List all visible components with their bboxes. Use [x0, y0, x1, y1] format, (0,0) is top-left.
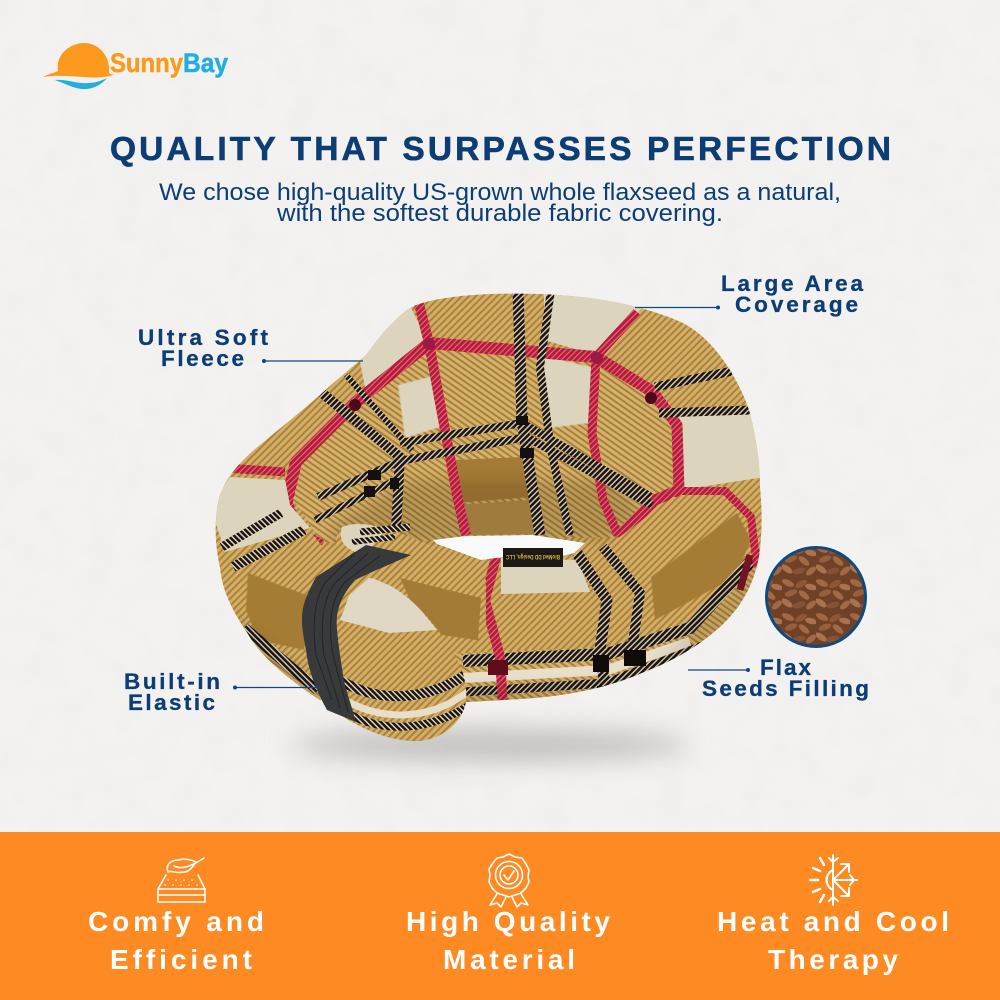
subtitle: [159, 179, 841, 227]
front black crossings: [488, 650, 646, 688]
callout: ultra soft fleece: [138, 325, 363, 371]
callout: large area coverage: Large Area: [721, 271, 863, 296]
back plaid red lines: [287, 300, 679, 545]
callout: built-in elastic: Elastic: [128, 690, 215, 715]
logo: SunnyBay: [43, 43, 183, 89]
end roll pillow: [340, 578, 466, 742]
icon: mattress with feather: [158, 858, 205, 902]
bottom band: [244, 558, 758, 702]
callout: built-in elastic: Built-in: [124, 669, 220, 694]
logo wordmark: Sunny: [110, 48, 183, 78]
well cream patches: [398, 355, 594, 438]
text: comfy and efficient: [88, 906, 264, 975]
subtitle: We chose high-quality US-grown whole flaxseed as a natural,: [159, 179, 841, 206]
built-in elastic band: [302, 545, 411, 722]
icon: sun over waves: [43, 43, 118, 89]
inner well: [287, 343, 679, 543]
icon: heat and cool: [810, 855, 857, 905]
callout: flax seeds filling: [688, 655, 869, 701]
left ring red band: [226, 468, 285, 472]
front cream patches: [210, 477, 590, 594]
text: comfy and efficient: Comfy and: [88, 906, 264, 937]
fabric tag: [503, 548, 563, 567]
callout: flax seeds filling: Flax: [760, 655, 811, 680]
footer band: [0, 832, 1000, 1000]
callout: ultra soft fleece: Fleece: [161, 346, 244, 371]
rim cream patches: [360, 285, 765, 490]
callout: built-in elastic: [124, 669, 320, 715]
icon: quality badge: [489, 854, 529, 907]
text: high quality material: [406, 906, 610, 975]
callout: flax seeds filling: Seeds Filling: [702, 676, 869, 701]
small neck strap tube: [336, 524, 486, 640]
callout: large area coverage: Coverage: [735, 292, 858, 317]
logo wordmark: Bay: Bay: [183, 48, 228, 78]
callout: ultra soft fleece: Ultra Soft: [138, 325, 268, 350]
well brown fleece: [455, 457, 530, 503]
plaid red crossings: [349, 338, 657, 411]
back plaid black lines: [315, 290, 750, 535]
subtitle: with the softest durable fabric covering.: [276, 200, 723, 227]
center hole: [433, 535, 585, 560]
fabric tag: BioMed DD Design, LLC: [506, 553, 560, 560]
text: heat and cool therapy: Heat and Cool: [717, 906, 949, 937]
text: high quality material: Material: [443, 944, 575, 975]
product shadow: [290, 729, 690, 761]
title: QUALITY THAT SURPASSES PERFECTION: [110, 131, 891, 168]
flax seeds circle: [766, 548, 866, 646]
text: high quality material: High Quality: [406, 906, 610, 937]
bottom shading: [238, 566, 756, 702]
text: heat and cool therapy: Therapy: [768, 944, 898, 975]
front brown fleece patches: [246, 513, 751, 650]
callout: large area coverage: [635, 271, 863, 317]
front ring base: [200, 470, 770, 710]
text: comfy and efficient: Efficient: [110, 944, 252, 975]
text: heat and cool therapy: [717, 906, 949, 975]
plaid black crossings: [364, 416, 534, 497]
well shading: [330, 480, 640, 545]
product: plaid neck pillow: [216, 294, 762, 742]
pillow body: [216, 294, 762, 702]
front plaid lines: [222, 491, 757, 705]
